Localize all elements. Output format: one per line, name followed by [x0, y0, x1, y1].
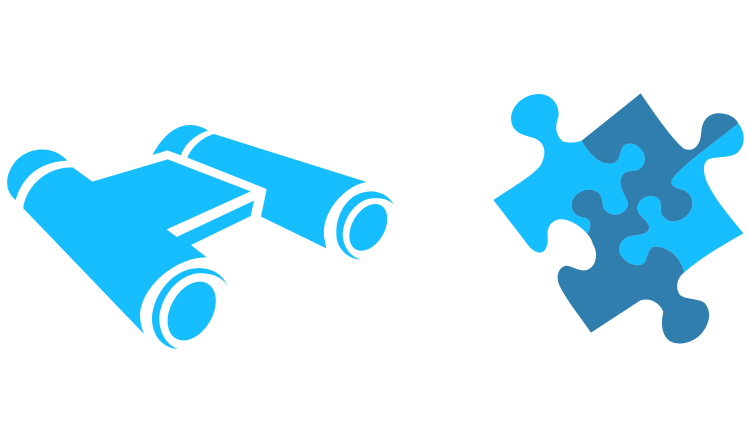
left eyecup: [7, 149, 67, 200]
light puzzle piece: right: [619, 123, 744, 273]
icon: binoculars: [7, 125, 395, 349]
left barrel body and bridge: [23, 159, 254, 334]
left lens ring: [152, 268, 228, 349]
right lens ring: [336, 191, 394, 259]
light puzzle piece: top left: [493, 94, 645, 253]
right lens: [342, 197, 395, 257]
right barrel body: [187, 134, 367, 248]
right eyecup: [153, 125, 208, 155]
dark puzzle pieces: [558, 93, 738, 343]
left lens: [158, 273, 226, 349]
icon: puzzle pieces: [493, 93, 744, 343]
